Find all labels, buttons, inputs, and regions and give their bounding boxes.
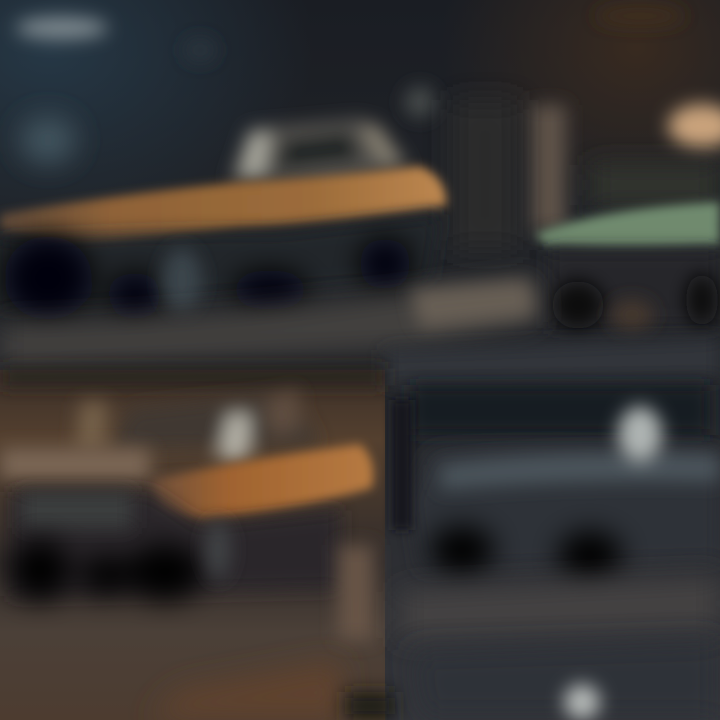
car: lower right dark bbox=[392, 385, 720, 579]
car roof and windows bbox=[228, 118, 412, 182]
car: upper orange bbox=[0, 118, 446, 320]
car: upper right green bbox=[535, 165, 720, 331]
car roof and windows bbox=[76, 388, 320, 460]
car body bbox=[0, 166, 446, 248]
car underside shadow bbox=[0, 214, 440, 310]
wheels bbox=[430, 526, 622, 579]
deck: middle parking level bbox=[0, 278, 720, 386]
car: lower orange bbox=[0, 388, 374, 600]
car body bbox=[150, 444, 374, 520]
wheels bbox=[10, 540, 203, 600]
light roof strip left bbox=[0, 448, 150, 480]
car underside shadow bbox=[10, 492, 340, 596]
wheels bbox=[4, 236, 411, 320]
floor: lower level bbox=[150, 545, 720, 720]
ceiling lights and pillar bbox=[16, 7, 720, 250]
